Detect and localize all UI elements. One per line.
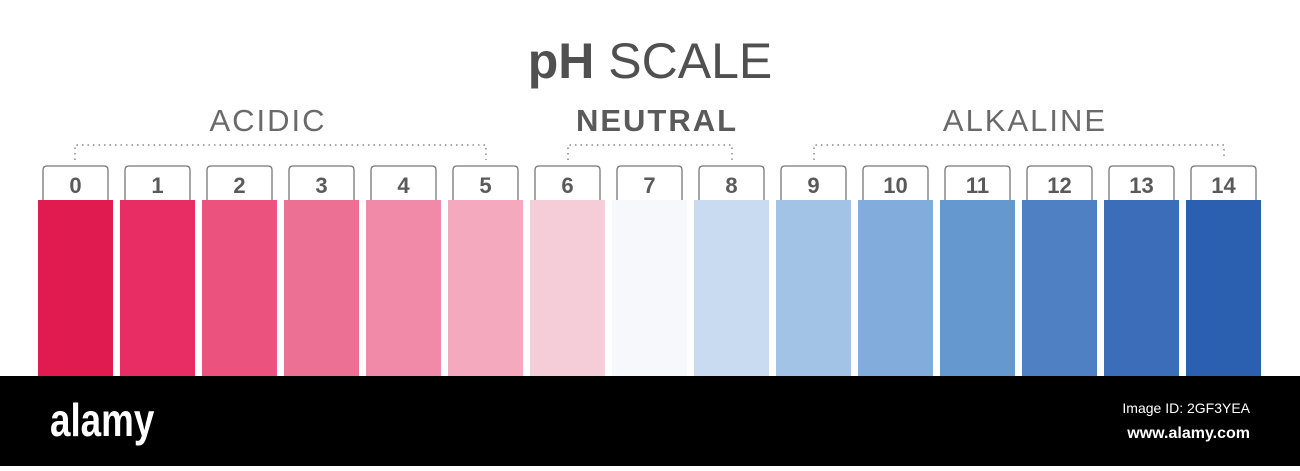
bracket: neutral xyxy=(568,145,732,160)
heading: acidic: ACIDIC xyxy=(209,103,327,138)
website: www.alamy.com xyxy=(1126,425,1250,442)
scale bars: 12 xyxy=(1047,173,1072,198)
scale bars: 11 xyxy=(966,173,989,198)
scale bars: 7 xyxy=(643,173,656,198)
heading: neutral: NEUTRAL xyxy=(576,103,738,138)
scale bars: 1 xyxy=(151,173,164,198)
logo text: alamy xyxy=(50,394,154,446)
scale bars: 13 xyxy=(1129,173,1154,198)
bracket: alkaline xyxy=(814,145,1224,160)
scale bars: 8 xyxy=(725,173,738,198)
scale bars: 10 xyxy=(883,173,908,198)
scale bars: 14 xyxy=(1211,173,1236,198)
image id: Image ID: 2GF3YEA xyxy=(1122,400,1251,416)
scale bars: 2 xyxy=(233,173,246,198)
heading: alkaline: ALKALINE xyxy=(943,103,1107,138)
scale bars: 4 xyxy=(397,173,410,198)
scale bars: 9 xyxy=(807,173,820,198)
title: pH SCALE xyxy=(528,33,772,89)
footer band xyxy=(0,376,1300,466)
scale bars: 0 xyxy=(69,173,82,198)
scale bars xyxy=(38,166,1261,376)
scale bars: 5 xyxy=(479,173,492,198)
scale bars: 3 xyxy=(315,173,328,198)
bracket: acidic xyxy=(75,145,486,160)
scale bars: 6 xyxy=(561,173,574,198)
